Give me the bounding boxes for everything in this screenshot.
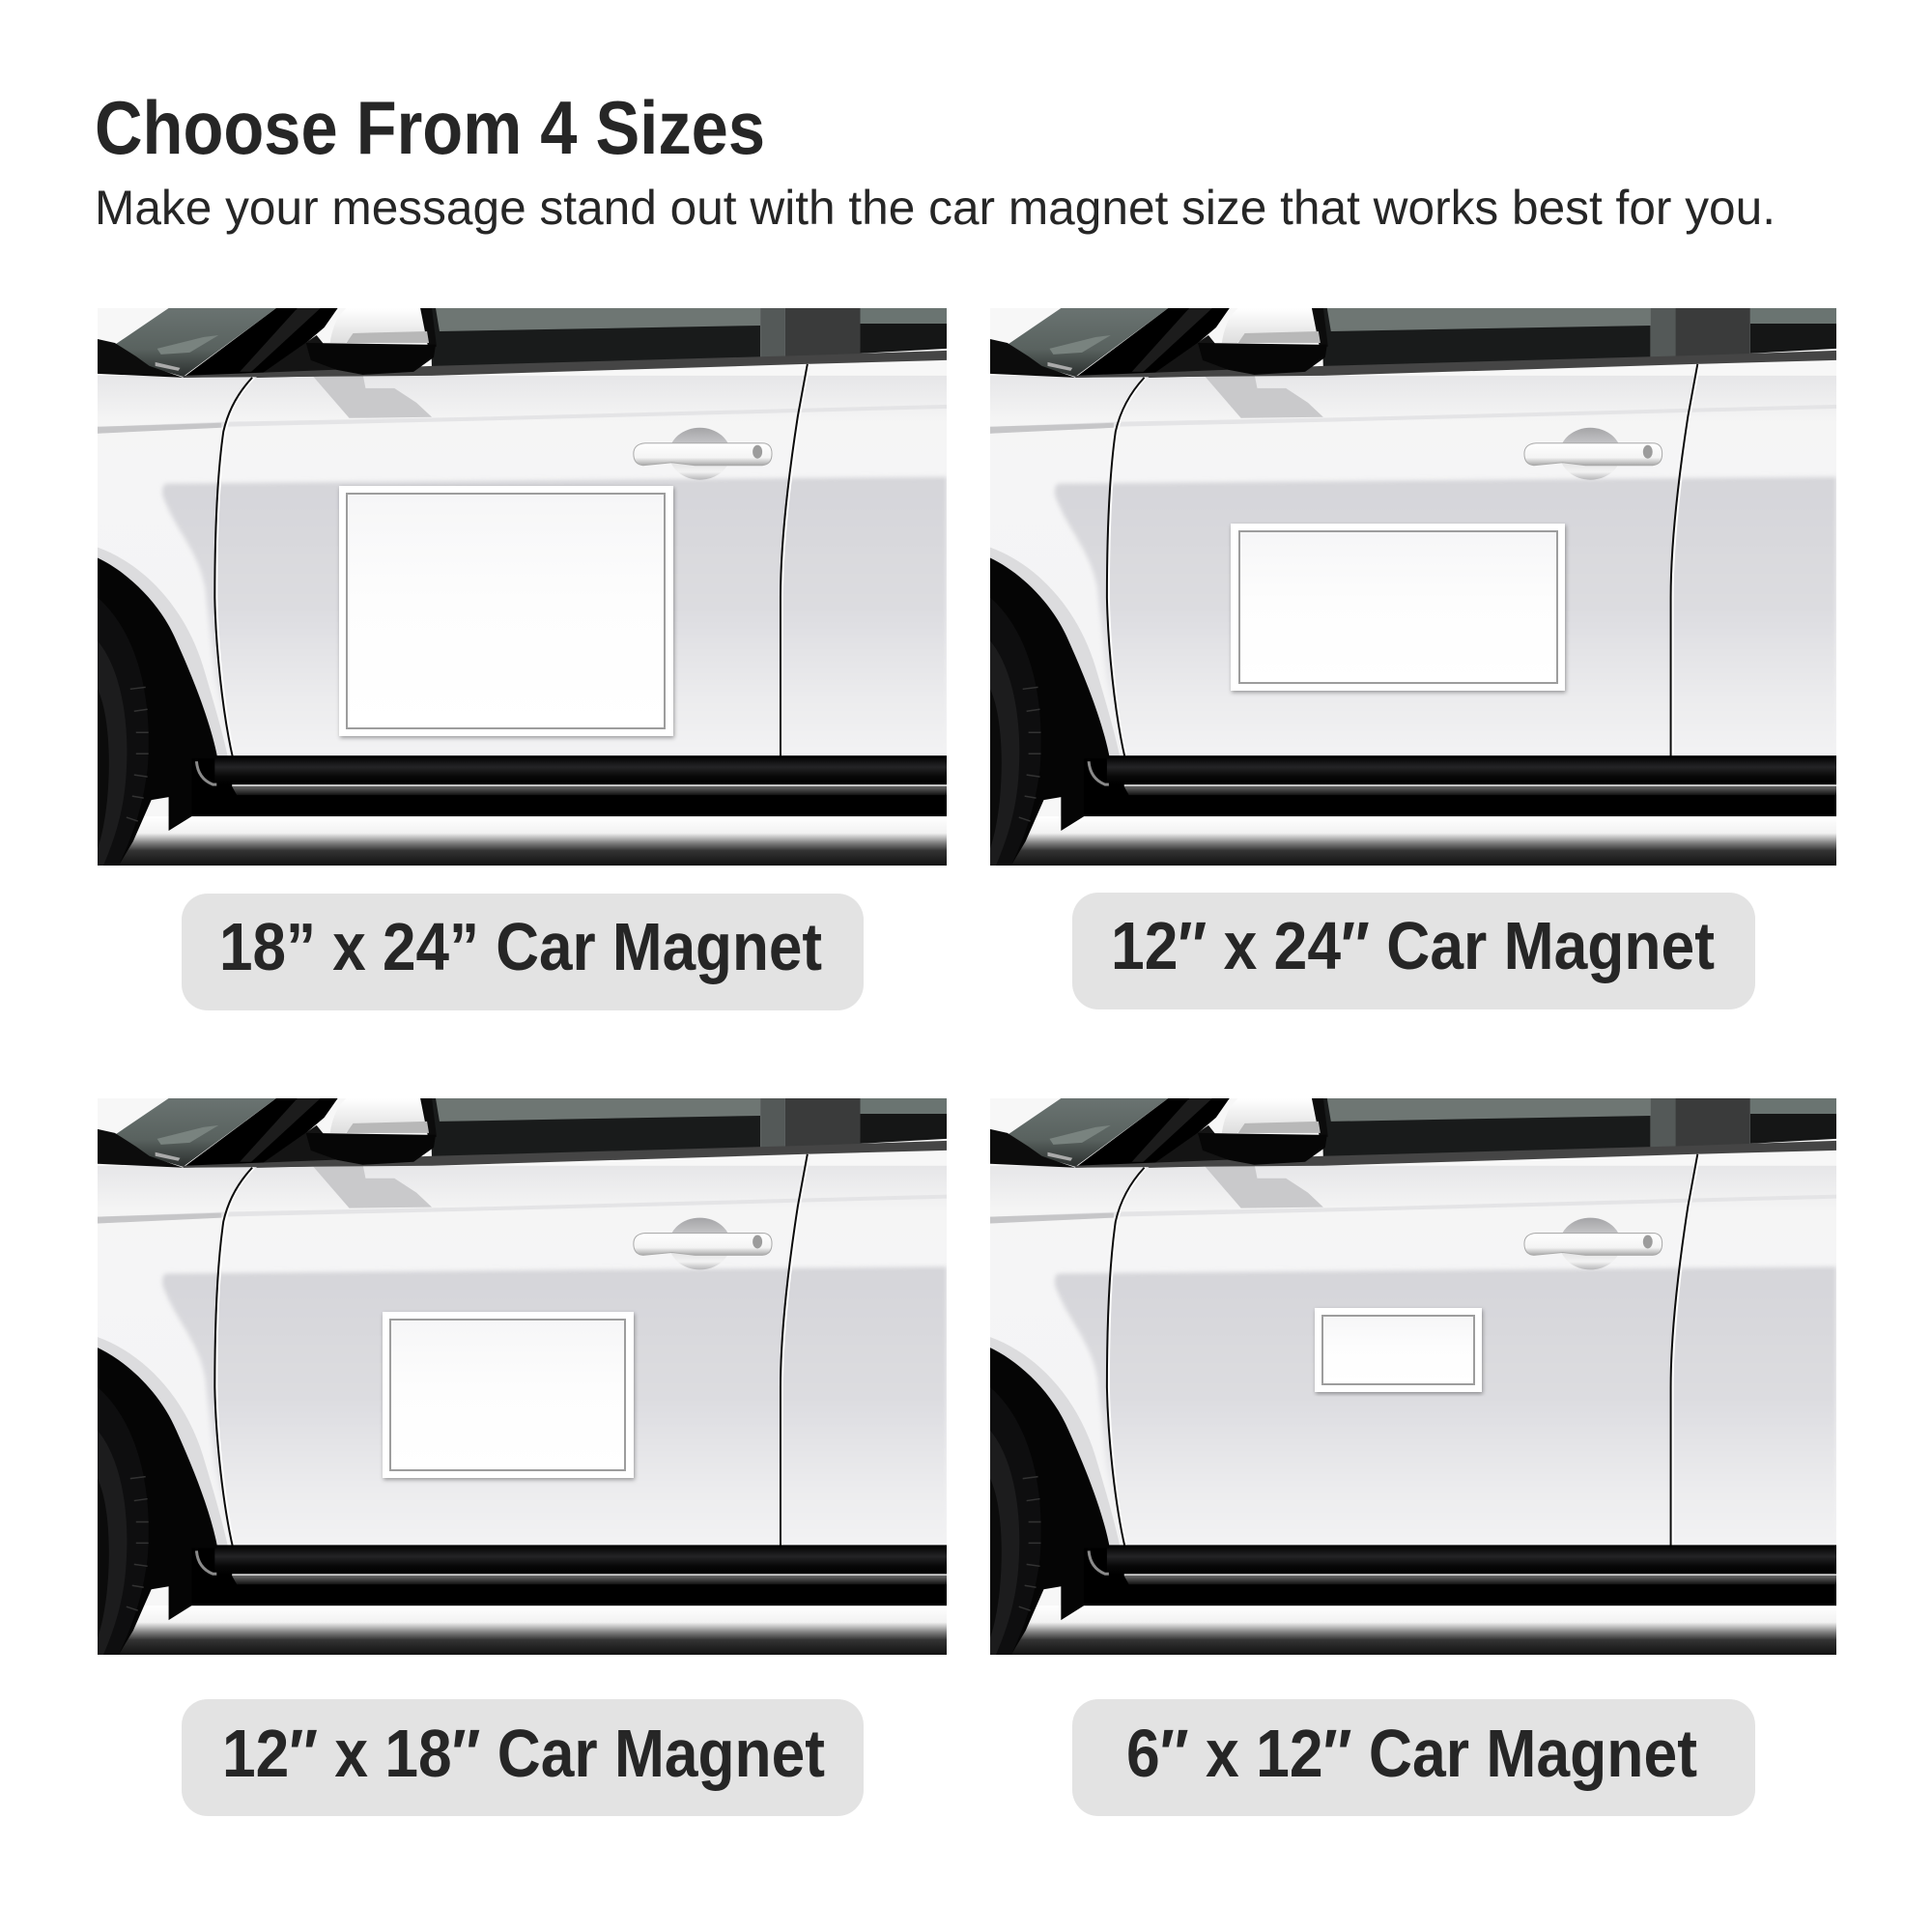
subtitle: Make your message stand out with the car magnet size that works best for you. [95, 181, 1776, 235]
label: 12 x 18: 12″ x 18″ Car Magnet [222, 1716, 825, 1791]
panel: 18 x 24 car photo [98, 308, 947, 866]
label: 6 x 12: 6″ x 12″ Car Magnet [1126, 1716, 1697, 1791]
label: 6 x 12 [1072, 1699, 1755, 1816]
panel: 6 x 12 car photo [990, 1098, 1836, 1655]
label: 12 x 24: 12″ x 24″ Car Magnet [1111, 908, 1715, 983]
title: Choose From 4 Sizes [95, 85, 765, 170]
magnet: 18 x 24 [339, 486, 673, 736]
magnet: 12 x 24 [1231, 524, 1565, 691]
magnet: 12 x 18 [383, 1312, 634, 1478]
panel: 12 x 24 car photo [990, 308, 1836, 866]
label: 18 x 24 [182, 894, 864, 1010]
magnet: 6 x 12 [1315, 1308, 1482, 1392]
label: 12 x 24 [1072, 893, 1755, 1009]
label: 18 x 24: 18” x 24” Car Magnet [219, 909, 822, 984]
label: 12 x 18 [182, 1699, 864, 1816]
panel: 12 x 18 car photo [98, 1098, 947, 1655]
